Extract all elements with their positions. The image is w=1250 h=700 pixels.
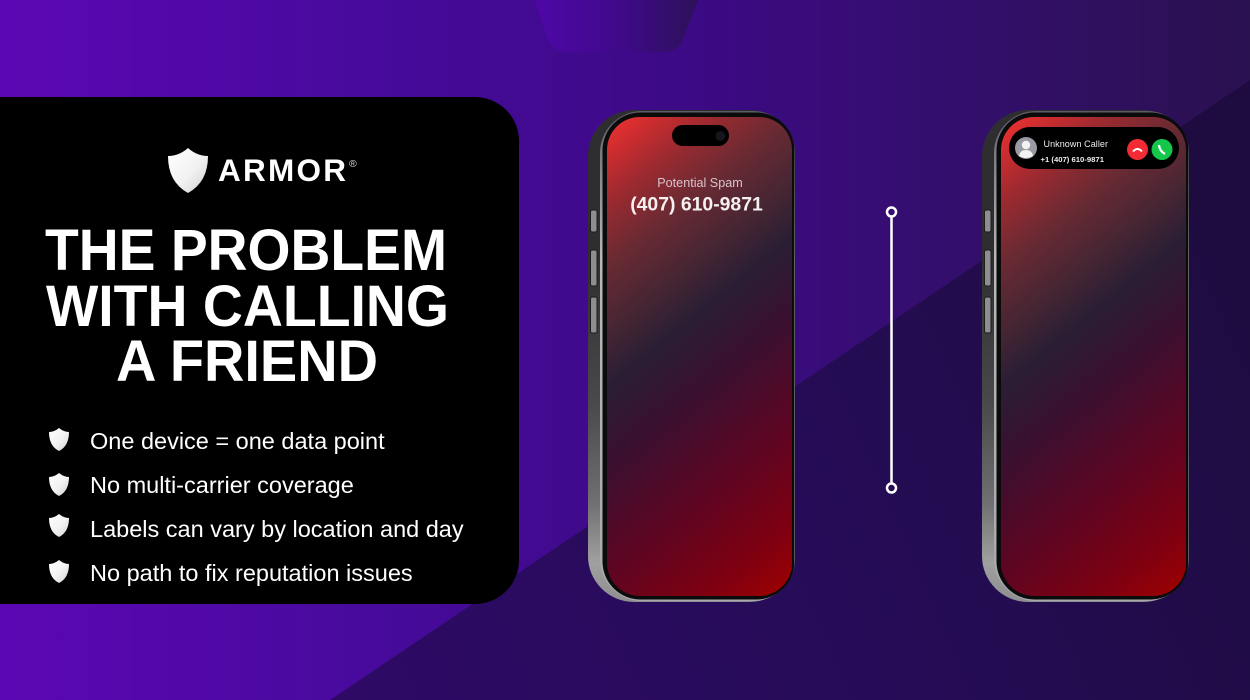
phone body (982, 110, 1189, 602)
icon: logo shield (168, 148, 208, 193)
bullet: labels vary: Labels can vary by location and day (90, 516, 464, 542)
connector line (887, 208, 896, 492)
title: THE PROBLEM (45, 218, 447, 283)
screen (607, 117, 792, 596)
call banner (1009, 127, 1179, 169)
dynamic island (672, 125, 729, 146)
logo: Armor (168, 148, 357, 193)
title: WITH CALLING (46, 274, 449, 339)
icon: accept (1152, 139, 1172, 160)
icon: avatar (1015, 137, 1037, 159)
screen (1001, 117, 1186, 596)
bullet: reputation: No path to fix reputation issues (90, 560, 413, 586)
side buttons (590, 210, 597, 333)
spam label: Potential Spam (657, 176, 743, 190)
side buttons (984, 210, 991, 333)
bullet: one device: One device = one data point (90, 428, 385, 454)
top tab shape (535, 0, 698, 52)
bullet: multi-carrier: No multi-carrier coverage (90, 472, 354, 498)
phone number: (407) 610-9871 (630, 194, 763, 216)
caller number: +1 (407) 610-9871 (1040, 155, 1105, 164)
caller name: Unknown Caller (1044, 139, 1108, 149)
phone body (588, 110, 795, 602)
panel: problem list (0, 97, 519, 604)
phone: potential spam (588, 110, 795, 602)
registered mark: ® (349, 158, 357, 170)
phone: incoming call (982, 110, 1189, 602)
title: A FRIEND (116, 329, 378, 394)
title (45, 218, 449, 394)
logo wordmark: ARMOR (218, 152, 346, 188)
icon: decline (1127, 139, 1148, 160)
